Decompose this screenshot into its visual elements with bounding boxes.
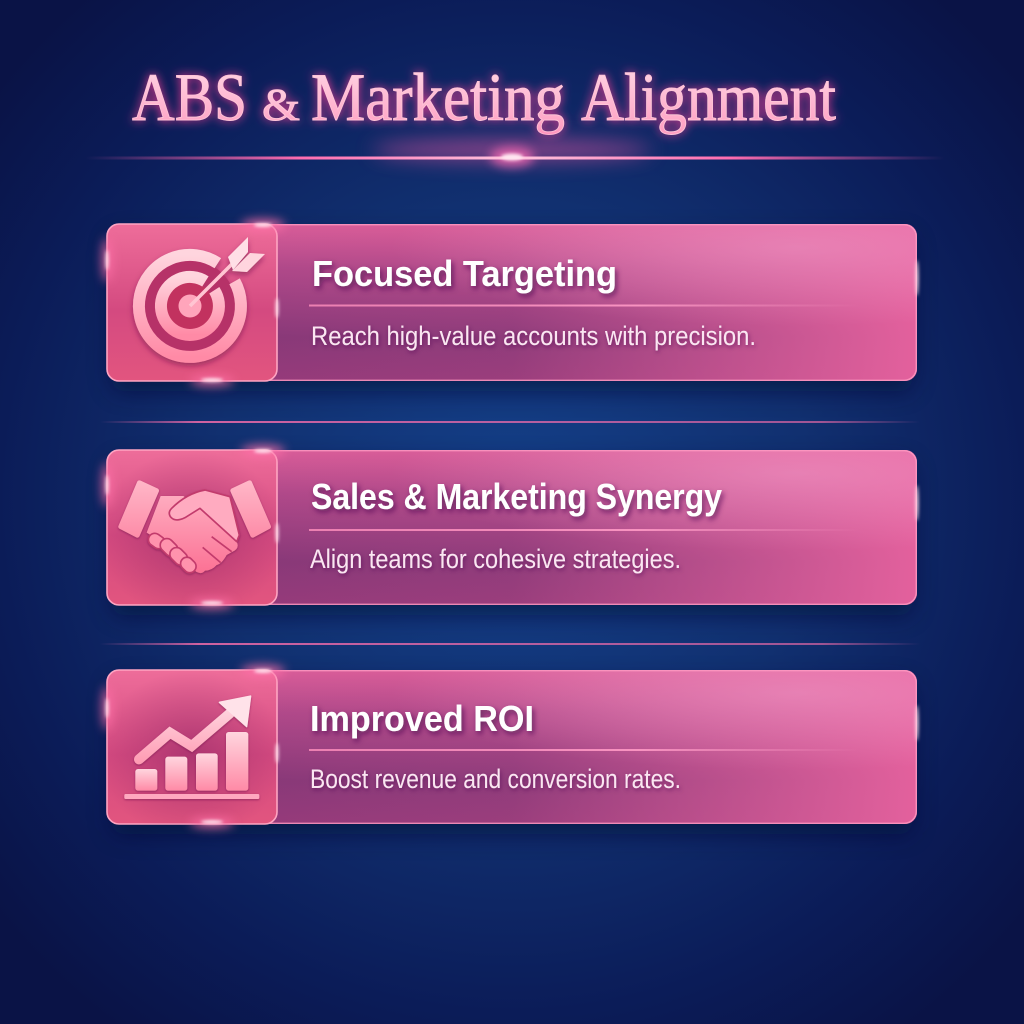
title: Alignment (581, 59, 836, 135)
icon tile: growth chart (102, 665, 285, 828)
title (132, 59, 836, 135)
icon: bar chart with rising arrow (124, 696, 259, 799)
panel: sales and marketing synergy (102, 445, 918, 615)
title: ABS (132, 59, 247, 135)
icon tile: handshake (102, 445, 285, 609)
panel: focused targeting (102, 219, 918, 391)
heading: Focused Targeting (312, 253, 617, 294)
icon tile: target (102, 219, 285, 386)
title glow divider (85, 139, 945, 167)
heading: Improved ROI (310, 698, 534, 739)
description: Boost revenue and conversion rates. (310, 764, 681, 794)
panel: improved roi (102, 665, 918, 834)
description: Align teams for cohesive strategies. (310, 544, 681, 574)
icon: target with arrow (139, 237, 265, 357)
description: Reach high-value accounts with precision. (311, 321, 756, 351)
icon: handshake (121, 483, 269, 575)
heading: Sales & Marketing Synergy (311, 476, 722, 517)
title: & (262, 79, 300, 130)
title: Marketing (311, 59, 565, 135)
